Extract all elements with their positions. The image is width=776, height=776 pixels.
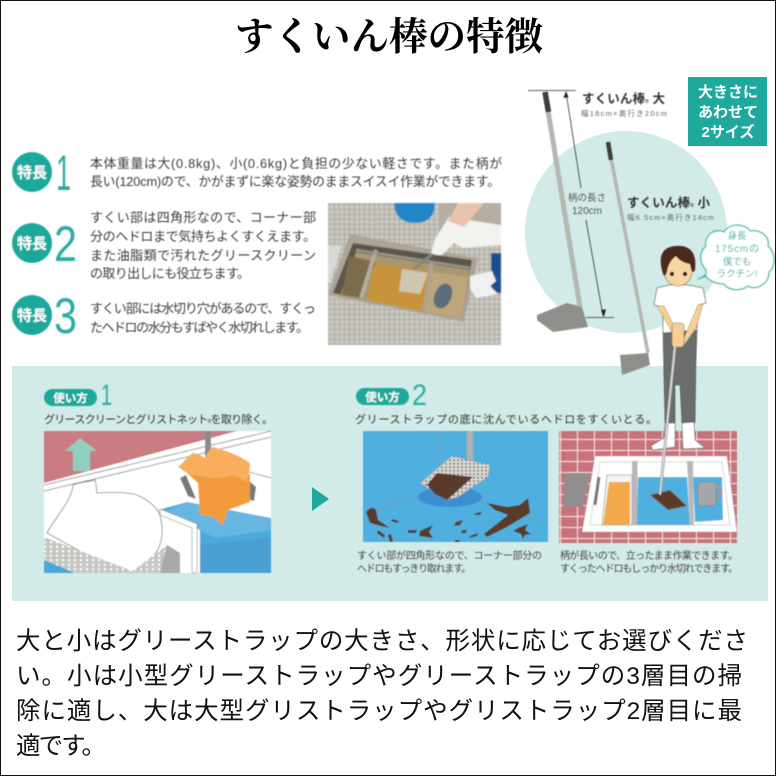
step 1 heading: 1 (101, 379, 112, 412)
feature 3: たヘドロの水分もすばやく水切れします。 (90, 320, 309, 335)
feature 3: 特長 (17, 306, 47, 324)
dimension: handle length 120cm: 120cm (572, 206, 602, 217)
description text (16, 627, 748, 760)
speech bubble: 僕でも (723, 256, 751, 268)
dimension: handle length 120cm (528, 90, 614, 318)
speech bubble (698, 225, 774, 290)
arrow between steps (312, 487, 329, 511)
man holding scoop (651, 246, 706, 495)
feature 2 (12, 210, 316, 281)
feature 3: すくい部には水切り穴があるので、すくっ (90, 301, 316, 316)
step 1 heading (44, 379, 273, 426)
step 2 heading: 使い方 (365, 390, 400, 404)
feature 2: また油脂類で汚れたグリースクリーン (90, 248, 316, 263)
feature 3 (12, 288, 316, 344)
label: large size: すくいん棒® 大 (582, 91, 665, 106)
feature 2: 分のヘドロまで気持ちよくすくえます。 (90, 229, 316, 244)
label: large size: 幅18cm×奥行き20cm (581, 108, 667, 118)
feature 2: すくい部は四角形なので、コーナー部 (90, 210, 316, 225)
callout: two sizes (688, 77, 767, 146)
caption: standing (560, 549, 738, 575)
description text: 除に適し、大は大型グリストラップやグリストラップ2層目に最 (16, 697, 742, 725)
small scoop (608, 142, 650, 375)
feature 2: 特長 (17, 234, 47, 252)
feature 2: の取り出しにも役立ちます。 (90, 266, 250, 281)
label: small size: 幅6.5cm×奥行き14cm (627, 212, 714, 222)
label: large size (581, 91, 667, 118)
step 2 heading: グリーストラップの底に沈んでいるヘドロをすくいとる。 (355, 412, 657, 426)
description text: い。小は小型グリーストラップやグリーストラップの3層目の掃 (16, 662, 742, 690)
caption: scoop (357, 549, 542, 575)
caption: standing: 柄が長いので、立ったまま作業できます。 (560, 549, 738, 562)
caption: scoop: すくい部が四角形なので、コーナー部分の (357, 549, 542, 562)
illustration: scoop sludge (363, 431, 548, 542)
label: small size: すくいん棒® 小 (627, 195, 710, 210)
feature 3: 3 (54, 288, 77, 344)
callout: two sizes: 2サイズ (702, 123, 754, 141)
speech bubble: 175cmの (715, 244, 759, 255)
panel: how to use background (12, 366, 768, 601)
callout: two sizes: 大きさに (698, 83, 758, 101)
description text: 大と小はグリーストラップの大きさ、形状に応じてお選びくださ (16, 627, 748, 655)
speech bubble: ラクチン! (717, 269, 757, 280)
label: small size (627, 195, 714, 222)
photo: grease trap being cleaned (328, 203, 501, 345)
caption: standing: すくったヘドロもしっかり水切れできます。 (560, 563, 738, 575)
step 1 heading: 使い方 (53, 391, 88, 405)
dimension: handle length 120cm: 柄の長さ (568, 192, 606, 204)
step 2 heading: 2 (412, 379, 427, 412)
step 2 heading (355, 379, 657, 426)
illustration: standing work in trap (559, 431, 737, 543)
pale teal circle behind scoops (525, 131, 727, 333)
feature 1: 特長 (17, 164, 47, 182)
illustration: remove grease screen and net (44, 431, 271, 573)
speech bubble: 身長 (727, 230, 747, 242)
large scoop (537, 92, 588, 332)
callout: two sizes: あわせて (698, 104, 758, 121)
feature 1: 長い(120cm)ので、かがまずに楽な姿勢のままスイスイ作業ができます。 (90, 174, 500, 189)
caption: scoop: ヘドロもすっきり取れます。 (357, 563, 471, 575)
description text: 適です。 (16, 732, 106, 760)
feature 1: 本体重量は大(0.8kg)、小(0.6kg)と負担の少ない軽さです。また柄が (90, 156, 502, 171)
feature 2: 2 (54, 216, 77, 272)
title: すくいん棒の特徴 (235, 16, 543, 59)
step 1 heading: グリースクリーンとグリストネット®を取り除く。 (44, 412, 273, 426)
feature 1 (12, 145, 502, 201)
feature 1: 1 (56, 145, 71, 201)
